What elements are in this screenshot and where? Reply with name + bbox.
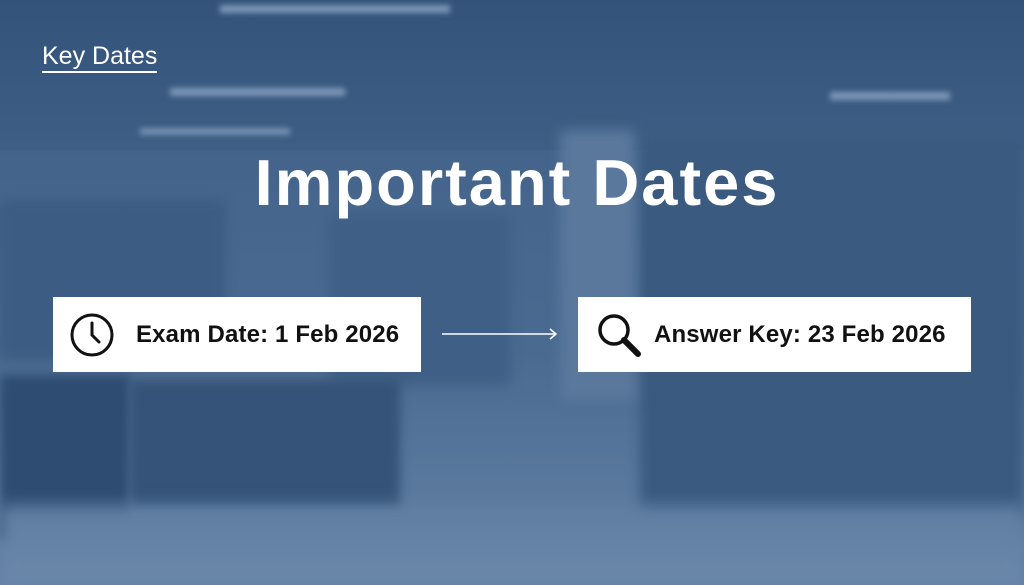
card: answer key xyxy=(578,297,971,372)
icon: clock xyxy=(70,314,114,356)
title: Important Dates xyxy=(255,146,779,219)
card: exam date xyxy=(53,297,421,372)
card: answer key: Answer Key: 23 Feb 2026 xyxy=(654,320,946,348)
icon: magnifier xyxy=(598,314,641,357)
label: Key Dates: Key Dates xyxy=(42,42,157,70)
arrow xyxy=(442,328,557,340)
card: exam date: Exam Date: 1 Feb 2026 xyxy=(136,320,399,348)
